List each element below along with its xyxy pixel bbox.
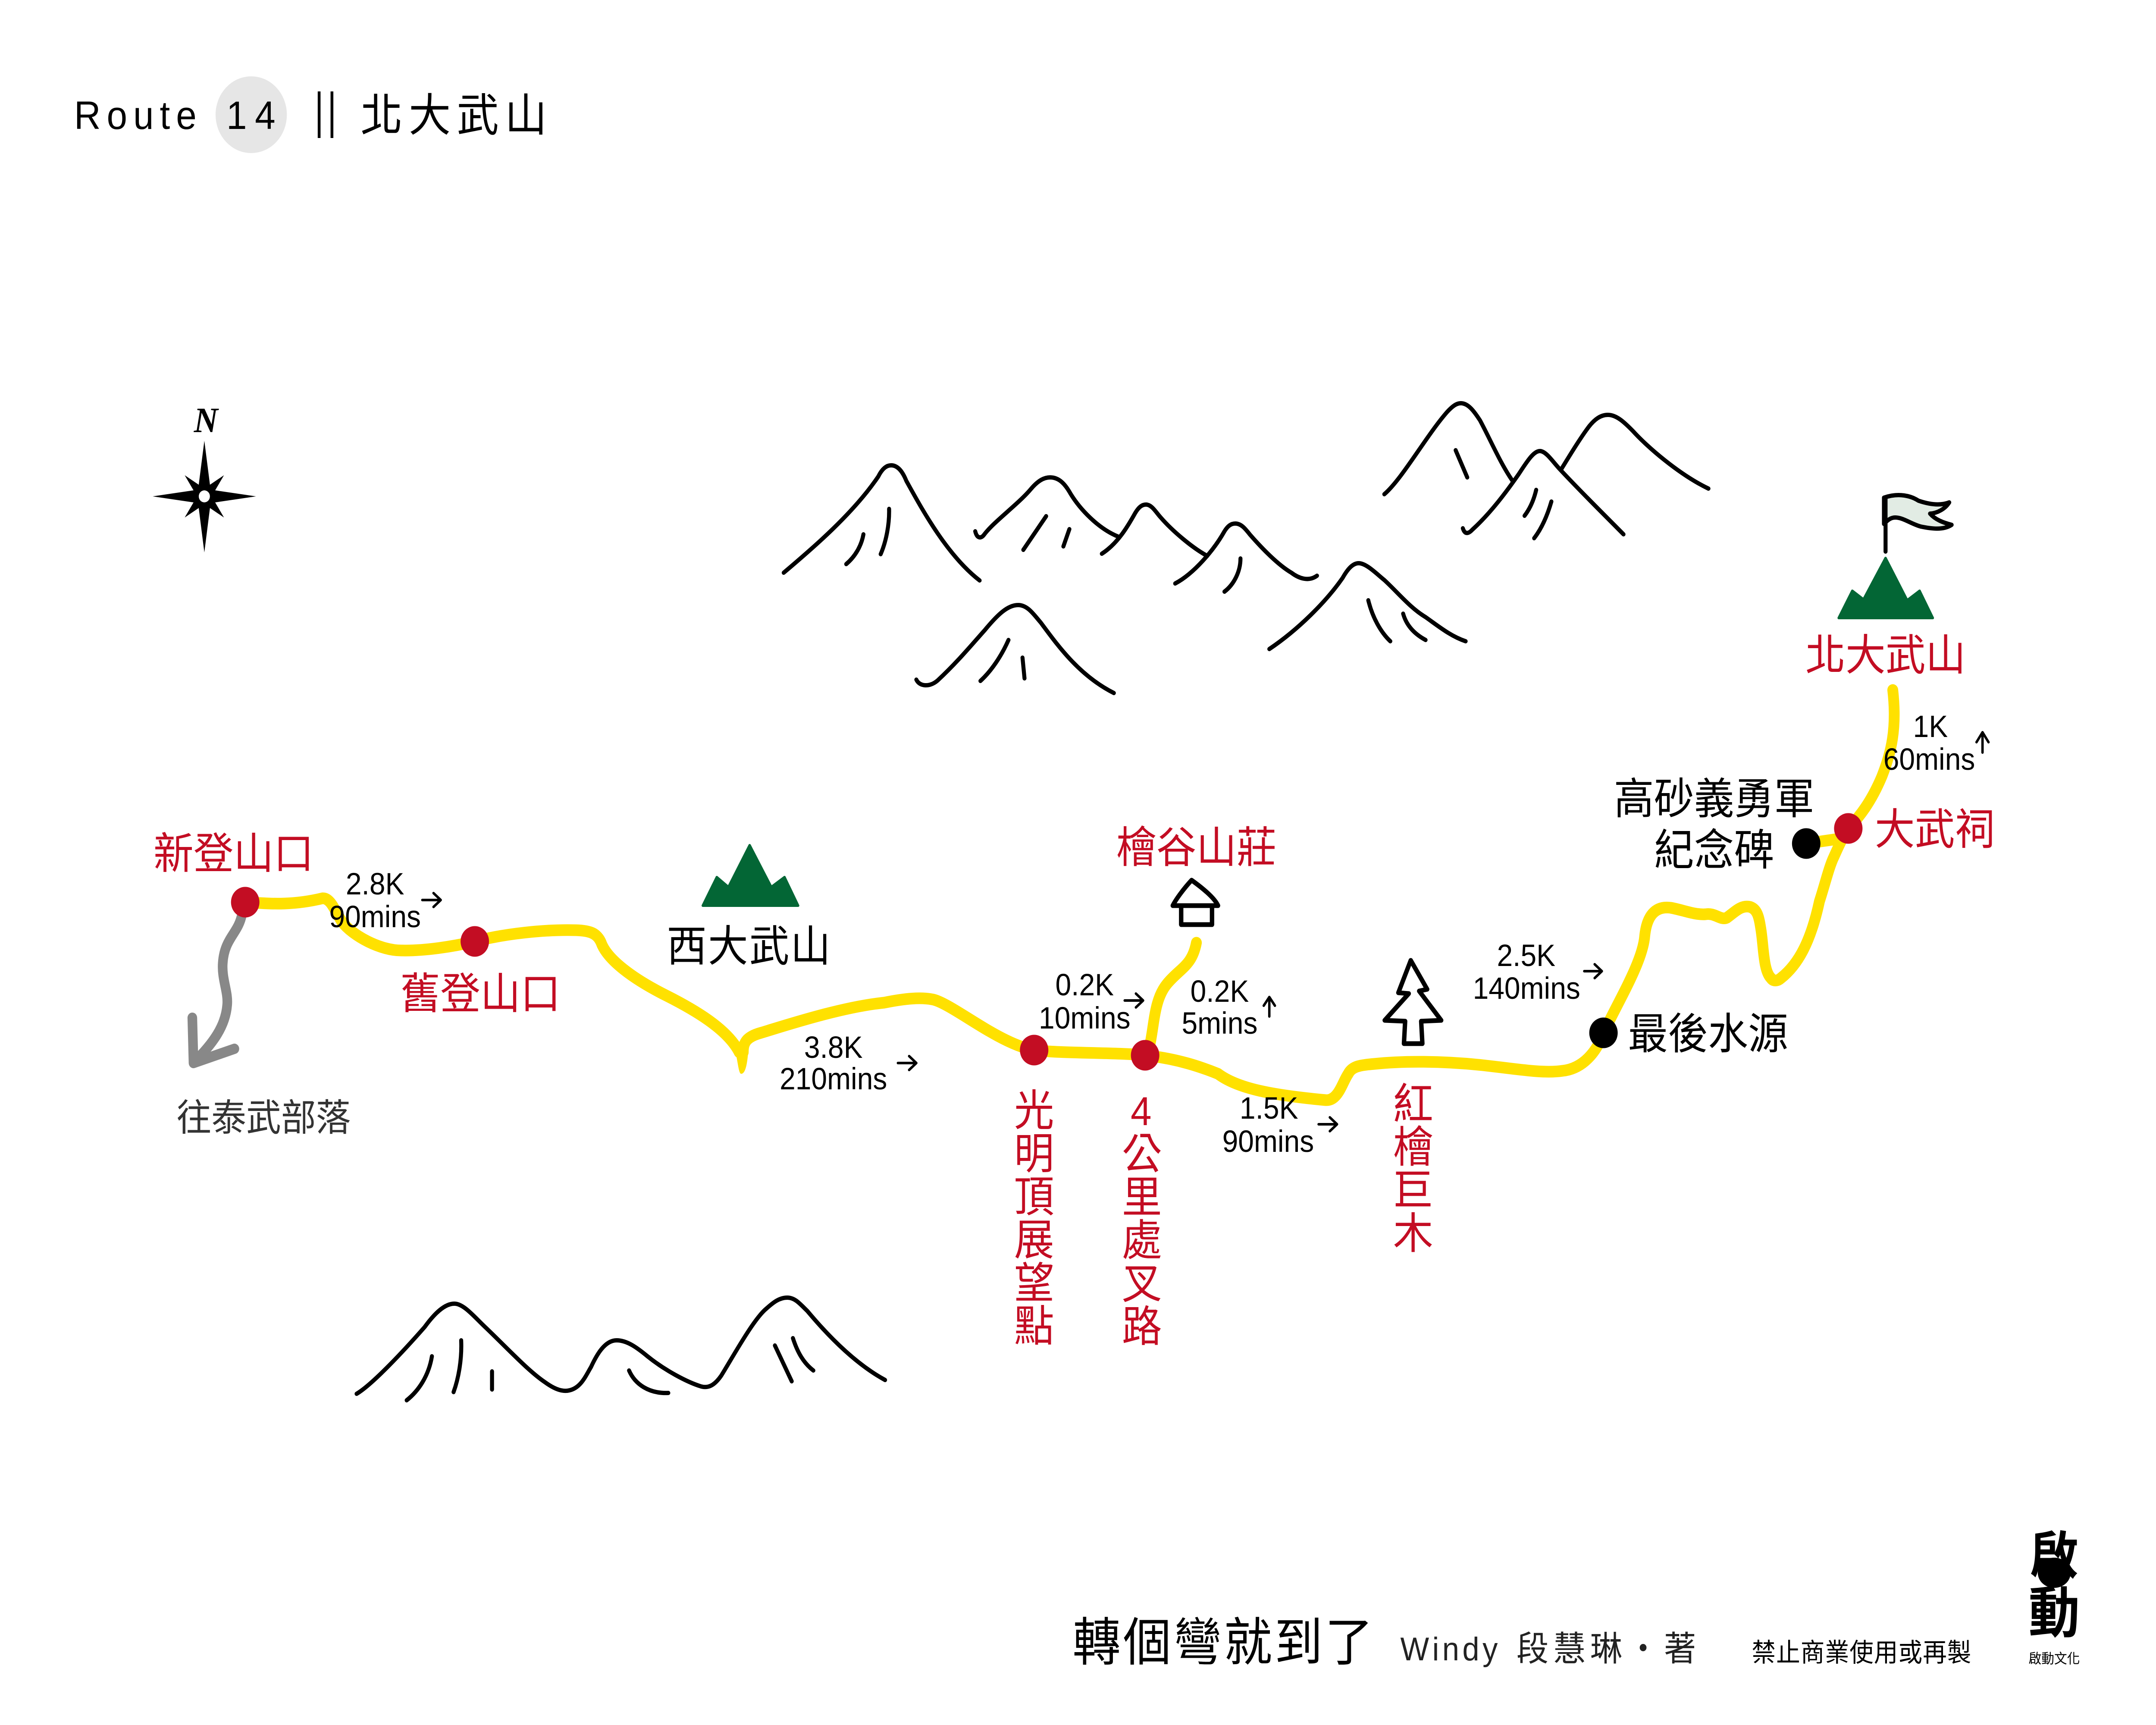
trail stops: red dots	[231, 813, 1862, 1070]
label: 高砂義勇軍紀念碑: 高砂義勇軍	[1614, 775, 1814, 823]
segment: 1.5K 90mins	[1222, 1091, 1337, 1159]
segment: 2.8K 90mins	[329, 867, 441, 934]
segment: 0.2K 5mins: 5mins	[1182, 1006, 1257, 1041]
footer: book title: 轉個彎就到了	[1072, 1613, 1376, 1672]
label: 光明頂展望點: 明	[1014, 1130, 1054, 1178]
title: Route	[74, 93, 203, 138]
logo: 動	[2029, 1583, 2080, 1644]
label: 紅檜巨木: 木	[1393, 1210, 1433, 1258]
trail stops: black dots	[1589, 828, 1821, 1048]
mountains: top right cluster	[1384, 403, 1708, 538]
segment: 0.2K 5mins: 0.2K	[1191, 974, 1249, 1009]
logo: 啟	[2030, 1527, 2078, 1585]
segment: 1.5K 90mins: 90mins	[1222, 1124, 1314, 1159]
icon: north peak	[1839, 558, 1933, 618]
label: 高砂義勇軍紀念碑: 紀念碑	[1654, 827, 1774, 875]
segment: 0.2K 5mins	[1182, 974, 1275, 1041]
segment: 1K 60mins: 60mins	[1883, 742, 1975, 777]
logo	[2029, 1527, 2080, 1666]
icon: west peak	[703, 845, 798, 906]
segment: 2.5K 140mins: 140mins	[1473, 971, 1580, 1006]
label: 光明頂展望點: 點	[1014, 1303, 1054, 1351]
label: 4公里處叉路: 路	[1122, 1303, 1162, 1351]
footer: copyright notice: 禁止商業使用或再製	[1752, 1639, 1971, 1667]
label: 舊登山口: 舊登山口	[400, 970, 561, 1018]
trail: main yellow route	[245, 690, 1894, 1100]
label: 紅檜巨木: 檜	[1393, 1124, 1433, 1172]
segment: 2.8K 90mins: 90mins	[329, 900, 421, 934]
footer: author: Windy	[1401, 1631, 1501, 1668]
segment: 1K 60mins	[1883, 709, 1989, 777]
icon: summit flag	[1884, 495, 1952, 552]
label: 光明頂展望點: 展	[1014, 1217, 1054, 1264]
icon: compass: N	[194, 401, 219, 440]
footer: author	[1401, 1630, 1701, 1669]
segment: 2.5K 140mins	[1473, 938, 1602, 1006]
label: 4公里處叉路: 4	[1131, 1089, 1152, 1134]
label: 光明頂展望點: 頂	[1014, 1173, 1054, 1221]
segment: 1.5K 90mins: 1.5K	[1240, 1091, 1298, 1126]
icon: compass	[153, 401, 256, 552]
label: 大武祠: 大武祠	[1875, 806, 1995, 854]
label: 西大武山: 西大武山	[667, 923, 832, 971]
title	[74, 76, 553, 153]
label: 4公里處叉路: 公	[1122, 1131, 1162, 1179]
label: 北大武山: 北大武山	[1805, 632, 1966, 680]
icon: red cypress tree	[1385, 960, 1441, 1044]
segment: 1K 60mins: 1K	[1913, 709, 1948, 744]
segment: 0.2K 10mins: 0.2K	[1055, 968, 1114, 1002]
label: 往泰武部落: 往泰武部落	[176, 1097, 351, 1139]
trail: side route to Taiwu village	[192, 914, 242, 1063]
segment: 0.2K 10mins: 10mins	[1039, 1001, 1131, 1035]
mountains: lower range	[357, 1298, 885, 1400]
label: 最後水源: 最後水源	[1628, 1010, 1788, 1058]
label: 檜谷山莊: 檜谷山莊	[1116, 824, 1276, 872]
icon: cabin	[1173, 880, 1218, 925]
label: 紅檜巨木: 巨	[1393, 1167, 1433, 1215]
label: 紅檜巨木: 紅	[1393, 1081, 1433, 1129]
title: 14	[226, 93, 283, 138]
title: 北大武山	[360, 91, 553, 141]
segment: 3.8K 210mins: 3.8K	[804, 1030, 863, 1065]
segment: 2.5K 140mins: 2.5K	[1497, 938, 1555, 973]
segment: 3.8K 210mins: 210mins	[780, 1062, 887, 1096]
label: 光明頂展望點: 光	[1014, 1087, 1054, 1135]
segment: 2.8K 90mins: 2.8K	[346, 867, 404, 901]
segment: 3.8K 210mins	[780, 1030, 916, 1096]
footer: author: 段慧琳・著	[1517, 1630, 1701, 1669]
logo: 啟動文化	[2029, 1651, 2080, 1666]
label: 新登山口: 新登山口	[154, 830, 314, 878]
mountains: upper cluster	[784, 465, 1466, 693]
label: 4公里處叉路: 叉	[1122, 1260, 1162, 1308]
segment: 0.2K 10mins	[1039, 968, 1143, 1035]
label: 4公里處叉路: 里	[1122, 1174, 1162, 1222]
label: 4公里處叉路: 處	[1122, 1217, 1162, 1265]
label: 光明頂展望點: 望	[1014, 1260, 1054, 1308]
